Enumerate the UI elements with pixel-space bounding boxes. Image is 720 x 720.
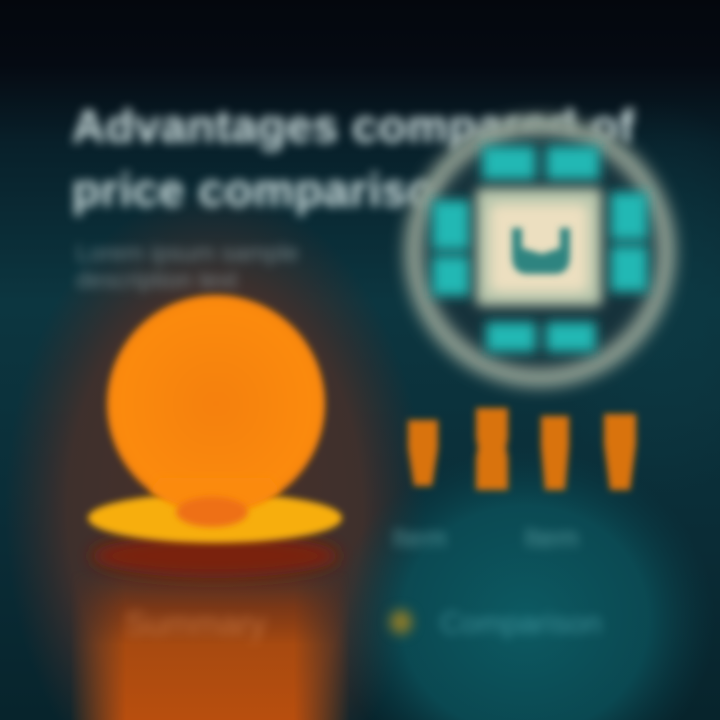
title: price comparisons [72, 164, 491, 216]
bottom-left label: Summary [125, 605, 266, 642]
subtitle text [74, 240, 300, 294]
title [67, 100, 641, 222]
bottom-right label: Comparison [440, 607, 602, 640]
icon: small orange dot [390, 610, 412, 634]
small teal labels: Item Item [392, 522, 579, 553]
subtitle text: description text [76, 267, 237, 294]
title: Advantages compared of [72, 100, 635, 152]
chip square [476, 188, 602, 306]
coin base plate [88, 493, 342, 543]
subtitle text: Lorem ipsum sample [76, 240, 299, 267]
coin disc [107, 295, 325, 513]
coin base shadow [91, 534, 339, 578]
